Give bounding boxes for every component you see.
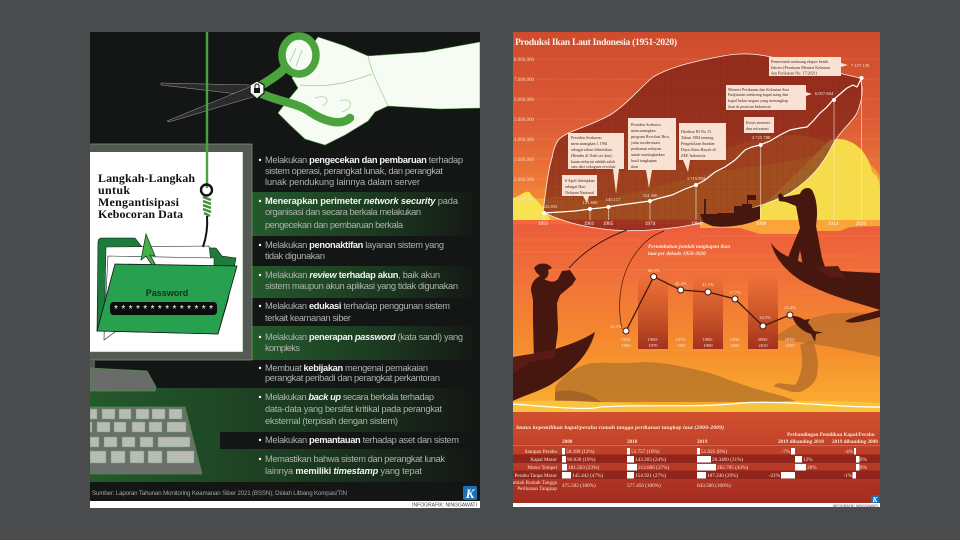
year labels: 2020	[856, 221, 867, 227]
annotation: 1974: program Revolusi Biru,	[631, 134, 670, 140]
step 4: sistem maupun akun aplikasi yang tidak digunakan	[265, 281, 458, 291]
column headings: 2019 dibanding 2010	[778, 439, 824, 445]
values: 154.921 (27%)	[635, 472, 666, 479]
icon: arrow cursor	[141, 234, 155, 265]
decade labels: 1990	[703, 343, 713, 348]
heading: Kebocoran Data	[98, 207, 183, 221]
point labels: 42,2%	[675, 281, 687, 287]
bars and values	[562, 448, 860, 478]
values: 187.240 (29%)	[707, 472, 738, 479]
step 7: Membuat kebijakan mengenai pemakaian	[265, 363, 428, 373]
annotation: 1961	[568, 133, 624, 194]
drop lines	[544, 78, 862, 220]
values: 282.785 (43%)	[717, 464, 748, 471]
points	[623, 274, 793, 334]
annotation: 1984: Direktur RI No 15	[681, 129, 711, 134]
decade labels: 1980	[676, 343, 686, 348]
annotation: 1960: Nelayan Nasional	[565, 190, 595, 195]
point labels: 14,5%	[759, 315, 771, 321]
step 3: tidak digunakan	[265, 251, 325, 261]
annotation: 1961: Presiden Soekarno	[571, 135, 602, 140]
step 6: Melakukan penerapan password (kata sandi) yang	[265, 332, 463, 342]
column headings: 2010	[627, 439, 638, 445]
values: -4%	[844, 449, 854, 455]
row labels: Kapal Motor	[530, 457, 557, 463]
values: -1%	[843, 473, 853, 479]
sea	[513, 220, 880, 407]
row labels: Jumlah Rumah Tangga	[509, 480, 558, 486]
values: 8%	[860, 465, 868, 471]
values: 58.399 (12%)	[566, 448, 595, 455]
values: 53.757 (10%)	[631, 448, 660, 455]
clouds	[513, 135, 880, 222]
source note: Sumber: Laporan Tahunan Monitoring Keamanan Siber 2021 (BSSN); Diolah Litbang Kompas/TIN	[92, 490, 347, 497]
line chart decade growth	[610, 231, 796, 349]
values	[562, 448, 868, 489]
decade labels: 1970-	[676, 337, 687, 342]
step 4: Melakukan review terhadap akun, baik akun	[265, 270, 440, 280]
value labels: 7.137.139	[851, 63, 870, 68]
step 3	[259, 240, 444, 261]
annotation: 1984: Tahun 1984 tentang	[681, 135, 713, 140]
values: 577.456 (100%)	[627, 482, 661, 489]
decade labels: 1980-	[703, 337, 714, 342]
list of steps	[259, 155, 463, 476]
step 8: data-data yang bersifat kritikal pada perangkat	[265, 404, 442, 414]
step 4	[259, 270, 458, 291]
annotation: 1974: yaitu modernisasi	[631, 140, 661, 145]
y axis labels: 0	[533, 219, 536, 224]
values: 12%	[803, 457, 813, 463]
row labels: Perikanan Tangkap	[517, 486, 557, 492]
step 6: kompleks	[265, 343, 300, 353]
values: 643.566 (100%)	[697, 482, 731, 489]
point markers	[542, 76, 864, 215]
decade labels	[621, 337, 796, 348]
values: 181.503 (23%)	[568, 464, 599, 471]
decade labels: 1970	[648, 343, 658, 348]
annotation: 1960	[562, 175, 597, 203]
logo: K	[463, 486, 477, 501]
panel: produksi ikan laut	[509, 32, 880, 508]
panel: kebocoran data	[88, 32, 480, 508]
step 9: Melakukan pemantauan terhadap aset dan sistem	[265, 435, 459, 445]
annotation: 2014	[726, 85, 812, 110]
annotation: 1984: ZEE Indonesia	[681, 153, 706, 158]
row labels: Sampan Perahu	[525, 449, 557, 455]
annotation: 1974: Presiden Soeharto	[631, 122, 661, 127]
point labels: 25,1%	[610, 324, 622, 330]
y axis labels: 2.000.000	[514, 178, 534, 183]
values: 8%	[860, 457, 868, 463]
values: 475.592 (100%)	[562, 482, 596, 489]
year labels: 1998	[756, 221, 767, 227]
y axis labels	[514, 58, 536, 224]
annotation: 1974: untuk meningkatkan	[631, 152, 665, 157]
decade labels: 1950-	[621, 337, 632, 342]
values: 145.442 (47%)	[572, 472, 603, 479]
point labels: 41,1%	[702, 282, 714, 288]
credit strip	[90, 501, 480, 508]
credit strip	[513, 503, 880, 508]
table heading: Status kepemilikan kapal/perahu rumah tangga perikanan tangkap laut (2000-2009)	[516, 424, 724, 431]
bars	[638, 283, 778, 349]
logo: K small: K	[871, 495, 878, 504]
annotation: 2020	[769, 57, 848, 76]
annotation: 1974: perikanan nelayan	[631, 146, 661, 151]
column headings: 2019	[697, 439, 708, 445]
annotation: 1961: kaum nelayan adalah salah	[571, 159, 615, 164]
ship silhouette	[700, 195, 760, 227]
values: 20%	[807, 465, 817, 471]
row labels: Motor Tempel	[527, 465, 558, 471]
password label: Password	[146, 288, 188, 298]
point labels: 68,3%	[648, 268, 660, 274]
step 10: lainnya memiliki timestamp yang tepat	[265, 466, 422, 476]
step 7: perangkat peribadi dan perangkat perkantoran	[265, 373, 440, 383]
credit strip: INFOGRAFIK: NINGGAWATI	[412, 502, 477, 508]
value labels: 145.117	[606, 197, 621, 202]
decade labels: 2010-	[785, 337, 796, 342]
step 1	[259, 155, 463, 187]
annotation: 2014: Menteri Perikanan dan Kelautan Susi	[728, 87, 790, 92]
bottom wave	[513, 401, 880, 412]
title: Produksi Ikan Laut Indonesia (1951-2020)	[515, 37, 677, 48]
step 6	[259, 332, 463, 353]
annotation: 1974: ikan	[631, 164, 638, 169]
year labels: 1965	[603, 221, 614, 227]
annotation: 1960: sebagai Hari	[565, 184, 586, 189]
chart heading	[648, 244, 730, 256]
values: -7%	[781, 449, 791, 455]
y axis labels: 5.000.000	[514, 118, 534, 123]
fishing line curve	[620, 231, 664, 329]
value labels: 323.835	[543, 204, 558, 209]
rows stripes	[513, 446, 880, 479]
chart heading: laut per dekade 1950-2020	[648, 251, 706, 257]
icon: jumping fish	[792, 316, 823, 342]
step 10: Memastikan bahwa sistem dan perangkat lunak	[265, 454, 445, 464]
annotation: 2020: lobster (Peraturan Menteri Kelautan	[771, 65, 830, 70]
year labels: 1951	[538, 221, 549, 227]
values: 90.838 (19%)	[567, 456, 596, 463]
value labels: 314.500	[643, 193, 658, 198]
step 5: terkait keamanan siber	[265, 313, 351, 323]
logo: K small	[871, 495, 879, 504]
credit strip: INFOGRAFIK: NINGGAWATI	[833, 504, 878, 508]
y axis labels: 7.000.000	[514, 78, 534, 83]
column headings	[562, 432, 878, 445]
annotation: 1998: Krisis moneter	[746, 120, 771, 125]
icon: hand holding scissors	[161, 36, 480, 145]
column headings: 2019 dibanding 2000	[832, 439, 878, 445]
step 1: Melakukan pengecekan dan pembaruan terhadap	[265, 155, 463, 165]
infographic spread	[90, 32, 880, 508]
step 2: pengecekan dan pembaruan berkala	[265, 220, 404, 230]
annotation: 1974: hasil tangkapan	[631, 158, 657, 163]
step 2	[259, 196, 459, 230]
decade labels: 1990-	[730, 337, 741, 342]
y axis labels: 1.000.000	[514, 198, 534, 203]
annotation: 1961: sebagai tahun dibentikan	[571, 147, 612, 152]
y axis labels: 4.000.000	[514, 138, 534, 143]
monitor stand	[90, 360, 156, 391]
step 5: Melakukan edukasi terhadap penggunan sistem	[265, 301, 450, 311]
step 8	[259, 392, 442, 426]
row labels	[509, 449, 558, 492]
chart heading: Pertambahan jumlah tangkapan ikan	[648, 244, 730, 250]
decade labels: 2020	[785, 343, 795, 348]
year labels: 1974	[645, 221, 656, 227]
point labels: 23,4%	[784, 305, 796, 311]
y axis labels: 3.000.000	[514, 158, 534, 163]
year labels: 1961	[584, 221, 595, 227]
keyboard	[90, 407, 202, 474]
value labels: 1.715.894	[687, 176, 706, 181]
annotation: 1998	[744, 117, 774, 133]
annotation: 1984: Pengelolaan Sumber	[681, 141, 715, 146]
value labels: 121.690	[583, 200, 598, 205]
annotation: 1974: mencanangkan	[631, 128, 656, 133]
fisherman standing on boat	[771, 188, 880, 323]
values: 213.806 (37%)	[638, 464, 669, 471]
folder with password	[97, 234, 237, 340]
value labels	[543, 63, 870, 209]
annotation: 1960: 6 April ditetapkan	[565, 178, 595, 183]
annotation: 1974	[628, 118, 676, 188]
step 1: lunak pendukung lainnya dalam server	[265, 177, 420, 187]
annotation: 2020: dan Perikanan No. 17/2021)	[771, 70, 818, 76]
column headings: 2000	[562, 439, 573, 445]
annotation: 1984	[679, 123, 726, 172]
year labels: 1984	[691, 221, 702, 227]
step 10	[259, 454, 445, 476]
fishing line and hook	[201, 32, 212, 247]
chart gridlines	[536, 59, 880, 199]
point labels	[610, 268, 796, 330]
monitor frame	[88, 144, 252, 360]
fish shaped chart area	[543, 54, 862, 231]
row labels: Perahu Tanpa Motor	[515, 473, 557, 479]
password field: **************	[114, 304, 213, 315]
values: -21%	[769, 473, 781, 479]
step 3: Melakukan penonaktifan layanan sistem yang	[265, 240, 444, 250]
production line chart	[538, 57, 870, 227]
step 5	[258, 302, 450, 321]
fisherman with rod and boat	[513, 230, 627, 401]
point labels: 37,7%	[729, 290, 741, 296]
heading: Mengantisipasi	[98, 195, 180, 209]
heading: Langkah-Langkah	[98, 171, 195, 185]
annotation: 1961: mencanangkan 1 1961	[571, 141, 608, 146]
year labels	[538, 221, 867, 227]
step 8: Melakukan back up secara berkala terhadap	[265, 392, 434, 402]
heading: untuk	[98, 183, 130, 197]
value labels: 2.725.788	[752, 135, 771, 140]
y axis labels: 6.000.000	[514, 98, 534, 103]
step 1: sistem operasi, perangkat lunak, dan perangkat	[265, 166, 443, 176]
annotation: 1961: satu dari sokoguru revolusi	[571, 164, 616, 169]
decade labels: 2010	[758, 343, 768, 348]
annotation: 2020: Pemerintah melarang ekspor benih	[771, 59, 828, 64]
step 7	[259, 363, 440, 383]
values: 51.025 (8%)	[701, 448, 727, 455]
green text bands	[90, 192, 480, 482]
annotation: 2014: kapal bekas negara yang menangkap	[728, 98, 788, 103]
heading	[98, 174, 195, 218]
column headings: Perbandingan Pemilikan Kapal/Perahu	[787, 432, 875, 438]
y axis labels: 8.000.000	[514, 58, 534, 63]
values: 20.3460 (31%)	[712, 456, 743, 463]
value labels: 6.057.604	[815, 91, 834, 96]
decade labels: 1960-	[648, 337, 659, 342]
production series	[544, 78, 862, 213]
year labels: 2014	[828, 221, 839, 227]
annotation: 1998: dan reformasi	[746, 126, 769, 131]
annotation: 1961: (Bendin di Nabi ser dan),	[571, 153, 612, 159]
step 8: eksternal (terpisah dengan sistem)	[265, 416, 398, 426]
decade labels: 1960	[621, 343, 631, 348]
series line	[626, 277, 790, 331]
annotation: 2014: ikan di perairan Indonesia	[728, 104, 771, 109]
table area	[509, 412, 880, 503]
decade labels: 2000-	[758, 337, 769, 342]
logo: K: K	[465, 486, 476, 501]
annotation: 1984: Daya Alam Hayati di	[681, 147, 717, 152]
values: 143.283 (24%)	[635, 456, 666, 463]
step 2: organisasi dan secara berkala melakukan	[265, 207, 421, 217]
step 2: Menerapkan perimeter network security pada	[265, 196, 459, 206]
decade labels: 2000	[730, 343, 740, 348]
annotation: 2014: Pudjiastuti melarang kapal asing dan	[728, 92, 788, 97]
